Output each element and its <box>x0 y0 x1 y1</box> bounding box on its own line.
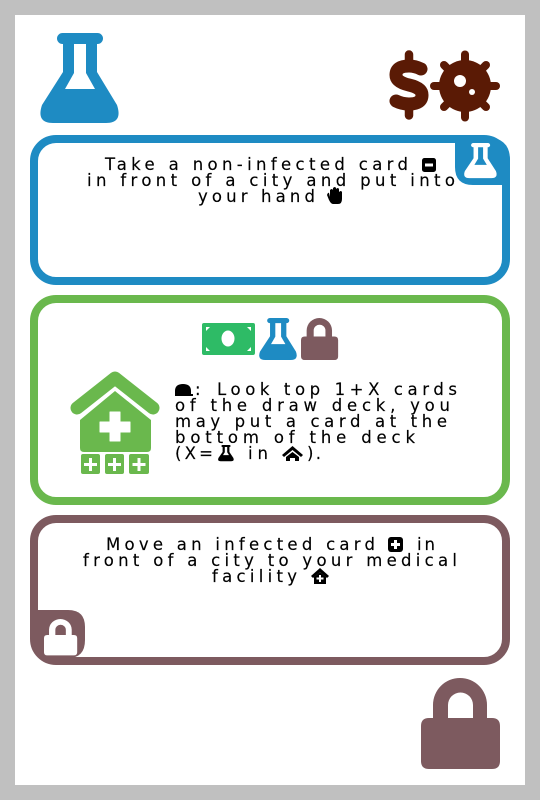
text: mauve panel rule: Move an infected card <box>106 535 375 554</box>
icon: hand <box>327 187 342 204</box>
panel: green action <box>34 299 506 501</box>
icon: black flask <box>218 445 234 461</box>
text: blue panel rule: in front of a city and put into <box>87 171 455 190</box>
text: green panel rule: (X= <box>175 444 213 463</box>
icon: medical facility house <box>77 378 153 474</box>
text: green panel rule: bottom of the deck <box>175 428 415 447</box>
text: green panel rule: of the draw deck, you <box>175 396 450 415</box>
panel: mauve action <box>33 519 506 661</box>
icon: mauve corner lock tab <box>33 610 85 658</box>
text: green panel rule: may put a card at the <box>175 412 447 431</box>
text: mauve panel rule: facility <box>212 567 297 586</box>
icon: small mauve lock <box>301 318 338 360</box>
icon: blue corner flask tab <box>455 137 510 185</box>
icon: black house <box>282 446 303 461</box>
panel: blue action <box>34 137 510 281</box>
text: green panel rule <box>175 380 457 463</box>
text: green panel rule: ). <box>307 444 321 463</box>
text: blue panel rule: Take a non-infected card <box>104 155 408 174</box>
text: blue panel rule <box>87 155 455 206</box>
icon: helmet <box>175 384 193 396</box>
text: mauve panel rule: front of a city to your medical <box>83 551 457 570</box>
icon: small blue flask <box>259 318 297 360</box>
icon: large mauve lock <box>421 678 500 769</box>
icon: money bill <box>202 323 255 355</box>
text: mauve panel rule <box>83 535 457 586</box>
text: green panel rule: in <box>248 444 268 463</box>
icon: plus card <box>388 537 403 552</box>
icon: dollar sign <box>396 54 422 116</box>
icon: large blue flask <box>40 33 119 123</box>
icon: virus gear <box>434 54 496 118</box>
text: green panel rule: : <box>195 380 201 399</box>
text: mauve panel rule: in <box>417 535 435 554</box>
text: blue panel rule: your hand <box>198 187 315 206</box>
icon: black medical house <box>311 568 329 584</box>
text: green panel rule: Look top 1+X cards <box>217 380 457 399</box>
icon: minus card <box>422 158 436 172</box>
